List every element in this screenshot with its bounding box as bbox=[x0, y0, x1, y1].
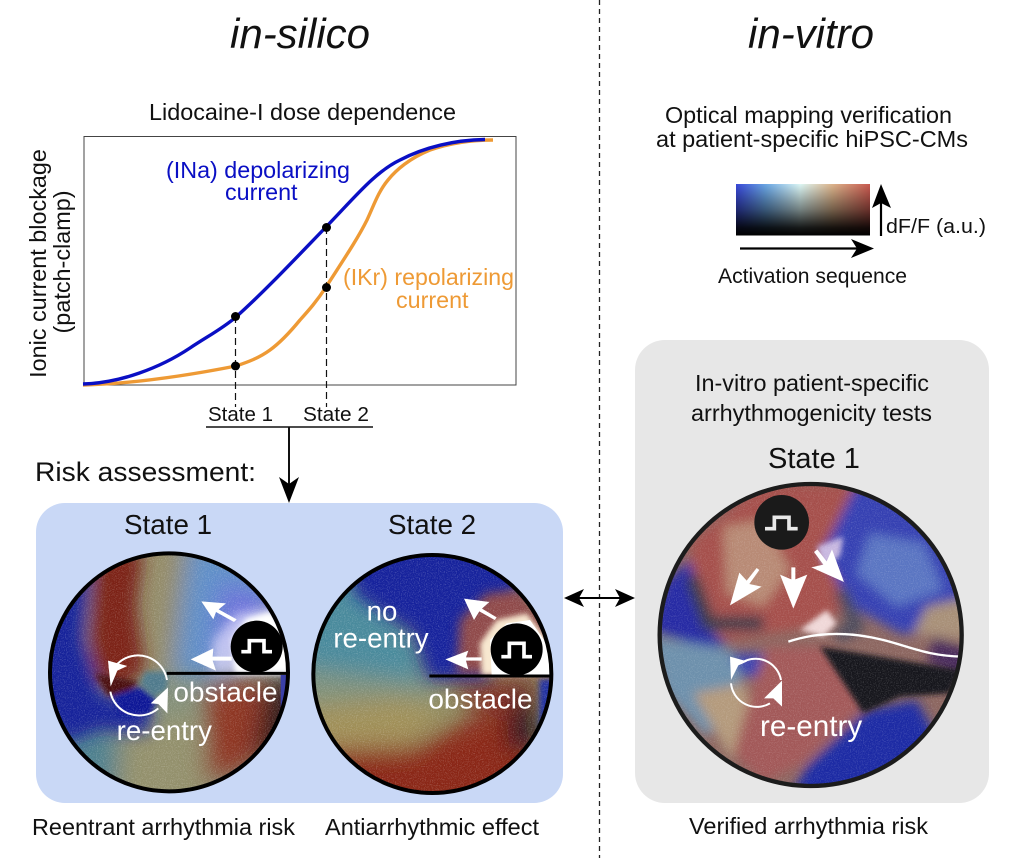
icon: stimulus pulse bbox=[491, 623, 543, 675]
heading: in-vitro tests bbox=[691, 370, 932, 426]
state points bbox=[231, 223, 331, 370]
label: re-entry: re-entry bbox=[117, 715, 212, 746]
arrows: propagation bbox=[730, 549, 844, 609]
INa label: (INa) depolarizing bbox=[166, 157, 350, 183]
obstacle line bbox=[167, 669, 288, 678]
caption: reentrant arrhythmia risk: Reentrant arrhythmia risk bbox=[32, 814, 295, 840]
heading: in-vitro tests: In-vitro patient-specific bbox=[695, 370, 929, 396]
obstacle line bbox=[788, 634, 962, 657]
chart: ionic current blockage dose dependence bbox=[25, 136, 516, 426]
heading: optical mapping verification: Optical mapping verification bbox=[665, 102, 952, 128]
IKr label bbox=[343, 264, 514, 313]
arrow: re-entry circuit bbox=[730, 657, 782, 707]
heading: state 1 simulation: State 1 bbox=[124, 509, 212, 540]
caption: verified arrhythmia risk: Verified arrhythmia risk bbox=[689, 813, 928, 839]
heading: dose dependence: Lidocaine-I dose dependence bbox=[149, 99, 456, 125]
circle outline bbox=[660, 484, 962, 786]
label: re-entry: re-entry bbox=[760, 710, 862, 743]
y axis label: Ionic current blockage bbox=[25, 149, 51, 378]
chart frame bbox=[84, 136, 516, 385]
simulation map: state 1 re-entry bbox=[48, 551, 290, 794]
title: in-vitro: in-vitro bbox=[748, 10, 874, 57]
icon: stimulus pulse bbox=[231, 621, 283, 673]
label: obstacle: obstacle bbox=[173, 676, 278, 707]
arrow: bracket from states to risk assessment bbox=[206, 427, 373, 503]
arrows: propagation bbox=[445, 599, 497, 669]
circle outline bbox=[50, 553, 288, 791]
IKr label: current bbox=[396, 287, 469, 313]
y axis label: (patch-clamp) bbox=[49, 191, 75, 333]
heading: state 1 in-vitro: State 1 bbox=[768, 443, 860, 475]
arrow: double-headed comparison bbox=[564, 589, 635, 607]
label: no re-entry bbox=[333, 596, 429, 654]
IKr curve bbox=[83, 140, 493, 385]
legend: colour scale bbox=[718, 184, 986, 288]
optical map: in-vitro re-entry bbox=[658, 482, 964, 788]
caption: antiarrhythmic effect: Antiarrhythmic effect bbox=[325, 814, 540, 840]
panel: in-vitro tests background bbox=[635, 340, 989, 803]
IKr label: (IKr) repolarizing bbox=[343, 264, 514, 290]
heading: in-vitro tests: arrhythmogenicity tests bbox=[691, 400, 932, 426]
state labels: State 2 bbox=[303, 403, 369, 426]
INa curve bbox=[83, 140, 485, 384]
label: no re-entry: re-entry bbox=[333, 623, 429, 654]
state labels: State 1 bbox=[208, 403, 273, 426]
circle outline bbox=[313, 555, 551, 793]
heading: state 2 simulation: State 2 bbox=[388, 509, 476, 540]
INa label: current bbox=[225, 179, 298, 205]
obstacle line bbox=[429, 671, 550, 680]
arrow: activation axis bbox=[740, 239, 874, 258]
y axis label bbox=[25, 149, 75, 378]
heading: risk assessment: Risk assessment: bbox=[35, 457, 256, 487]
INa label bbox=[166, 157, 350, 205]
heading: optical mapping verification: at patient-specific hiPSC-CMs bbox=[656, 126, 968, 152]
state guide lines bbox=[236, 227, 326, 407]
arrow: re-entry circuit bbox=[108, 655, 168, 715]
label: dF/F: dF/F (a.u.) bbox=[886, 215, 986, 238]
simulation map: state 2 no re-entry bbox=[311, 553, 554, 795]
state labels bbox=[208, 403, 369, 426]
icon: stimulus pulse bbox=[754, 495, 809, 550]
heading: optical mapping verification bbox=[656, 102, 968, 152]
arrow: dF/F axis bbox=[872, 184, 891, 236]
dashed divider between in-silico and in-vitro bbox=[598, 0, 600, 858]
label: activation sequence: Activation sequence bbox=[718, 265, 907, 288]
label: no re-entry: no bbox=[367, 596, 397, 627]
arrows: propagation bbox=[191, 601, 237, 671]
label: obstacle: obstacle bbox=[428, 684, 533, 715]
panel: in-silico risk assessment background bbox=[36, 503, 563, 803]
title: in-silico: in-silico bbox=[230, 10, 370, 57]
